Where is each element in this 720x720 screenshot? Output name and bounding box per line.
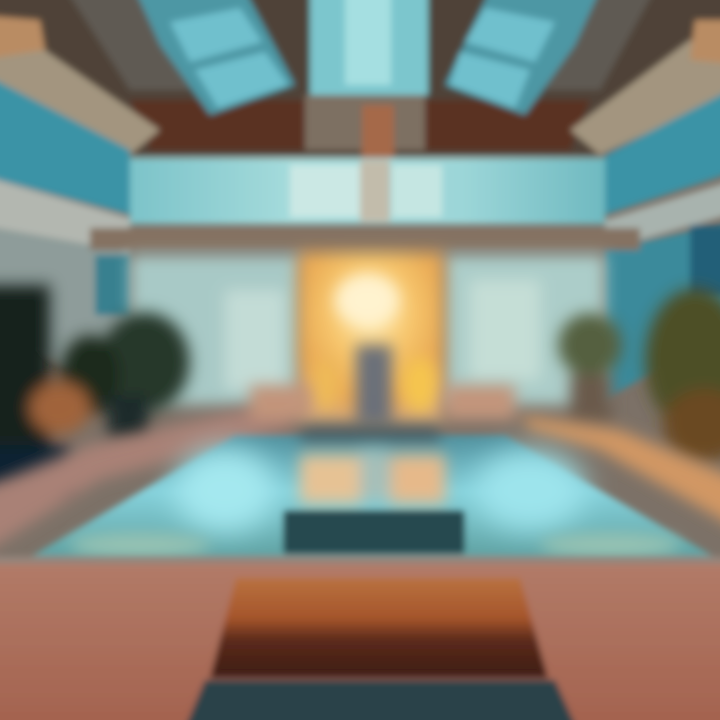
lower windows: [130, 255, 605, 405]
pool deck left and right: [0, 385, 720, 555]
pool edge: [0, 556, 720, 564]
skylight panels: [135, 0, 600, 115]
floor: [0, 560, 720, 720]
reflection of glow: [300, 426, 445, 503]
side walls teal glazing: [0, 72, 720, 400]
foreground lounger: [180, 578, 582, 720]
horizontal beam: [90, 228, 640, 250]
central sunlight glow: [298, 252, 444, 425]
swimming pool: [25, 426, 720, 560]
right plants: [558, 288, 720, 461]
left plants: [0, 285, 190, 490]
upper window band: [130, 158, 605, 224]
pool bench: [283, 510, 465, 554]
ceiling structure: [0, 0, 720, 160]
